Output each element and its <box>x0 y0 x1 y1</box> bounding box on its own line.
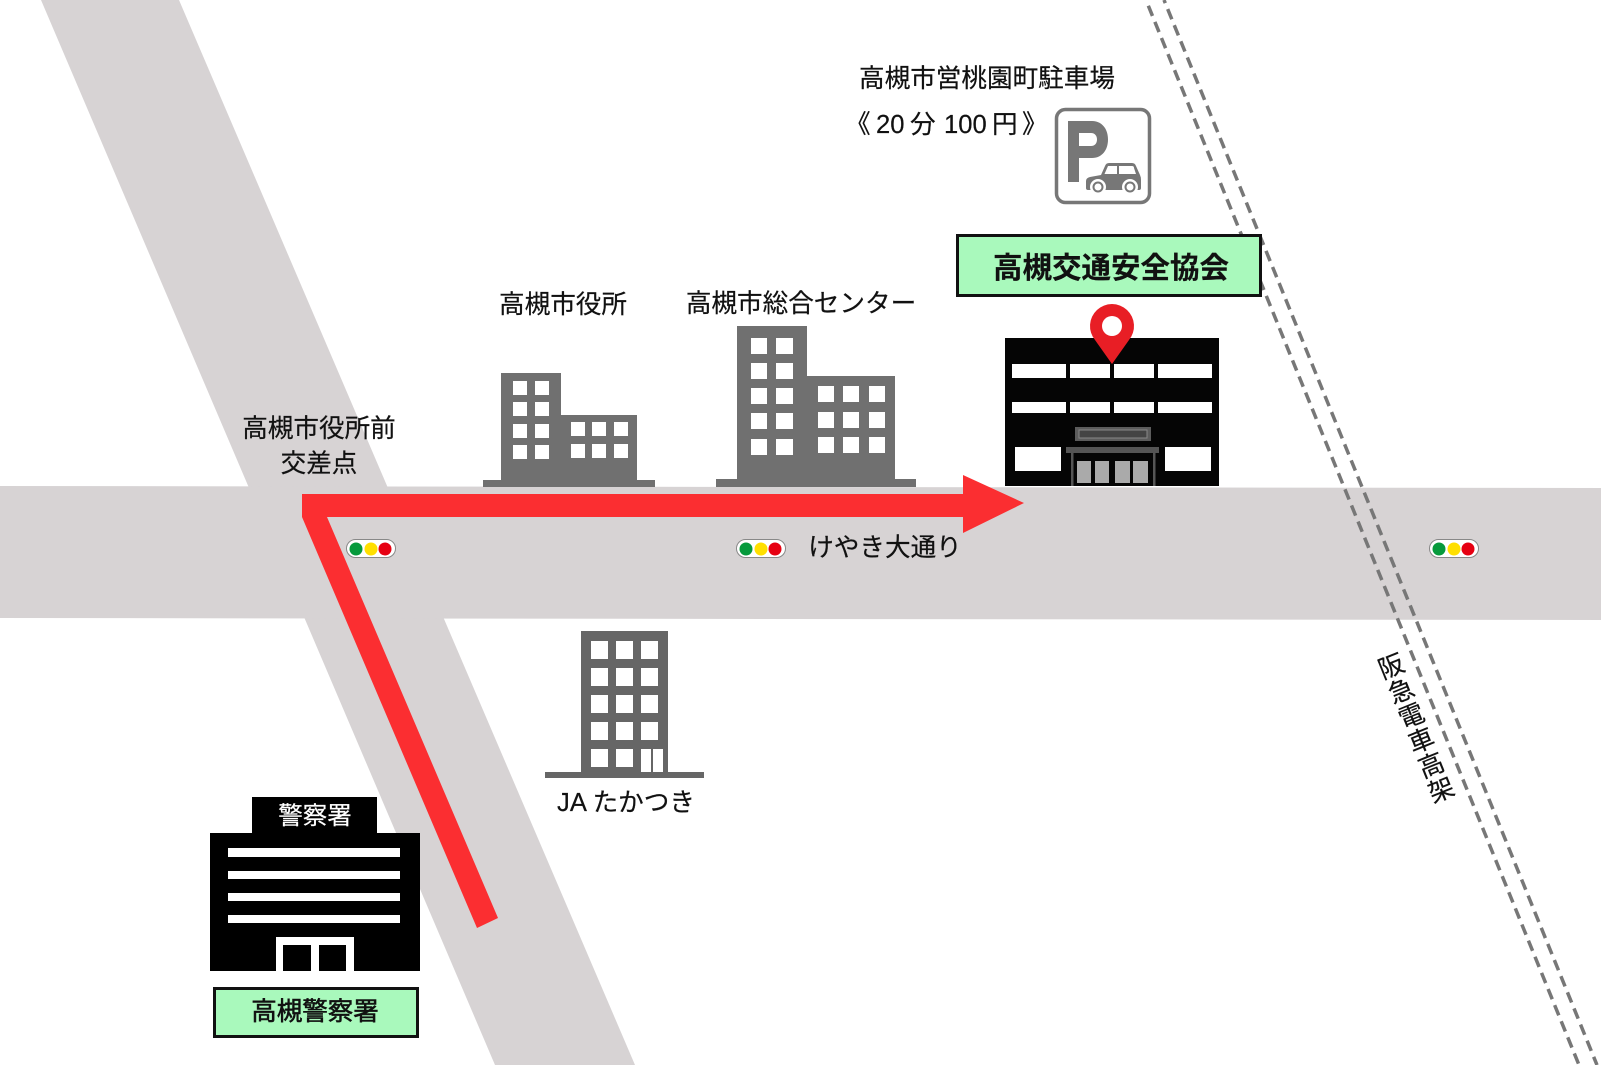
label box: police station: 高槻警察署 <box>251 998 379 1026</box>
label: parking name: 高槻市営桃園町駐車場 <box>859 64 1115 93</box>
label box: destination: 高槻交通安全協会 <box>993 252 1229 285</box>
label: railway: 阪急電車高架 <box>1371 649 1458 809</box>
label: parking price: 100 <box>944 111 987 139</box>
label: city hall: 高槻市役所 <box>499 290 627 319</box>
building: general center <box>716 326 916 487</box>
building: police station <box>210 797 420 971</box>
traffic light 1 <box>346 540 396 558</box>
label: general center: 高槻市総合センター <box>686 289 916 318</box>
diagonal road <box>41 0 635 1065</box>
label: JA: JA たかつき <box>557 789 695 817</box>
label: intersection: 高槻市役所前 <box>242 414 396 443</box>
label box: destination <box>958 236 1260 296</box>
traffic light 2 <box>736 540 786 558</box>
traffic light 3 <box>1430 540 1478 558</box>
label: parking price: 分 <box>910 111 936 139</box>
label: parking price: 《 <box>845 111 871 139</box>
icon: location pin <box>1090 304 1134 364</box>
label: parking price: 20 <box>876 111 904 139</box>
label box: police station <box>214 988 418 1036</box>
label: intersection: 交差点 <box>281 449 357 478</box>
label: intersection <box>242 414 396 478</box>
building: 高槻交通安全協会 <box>1005 338 1219 486</box>
label: road name: けやき大通り <box>808 533 962 562</box>
railway: Hankyu elevated track <box>1146 0 1597 1065</box>
route arrow <box>302 475 1024 928</box>
horizontal road: けやき大通り <box>0 486 1601 620</box>
building: police station: 警察署 <box>278 802 352 830</box>
building: JA <box>545 631 704 778</box>
label: parking price: 円 <box>992 111 1018 139</box>
label: parking price: 》 <box>1022 111 1048 139</box>
building: city hall <box>483 373 655 487</box>
icon: parking <box>1056 110 1150 202</box>
